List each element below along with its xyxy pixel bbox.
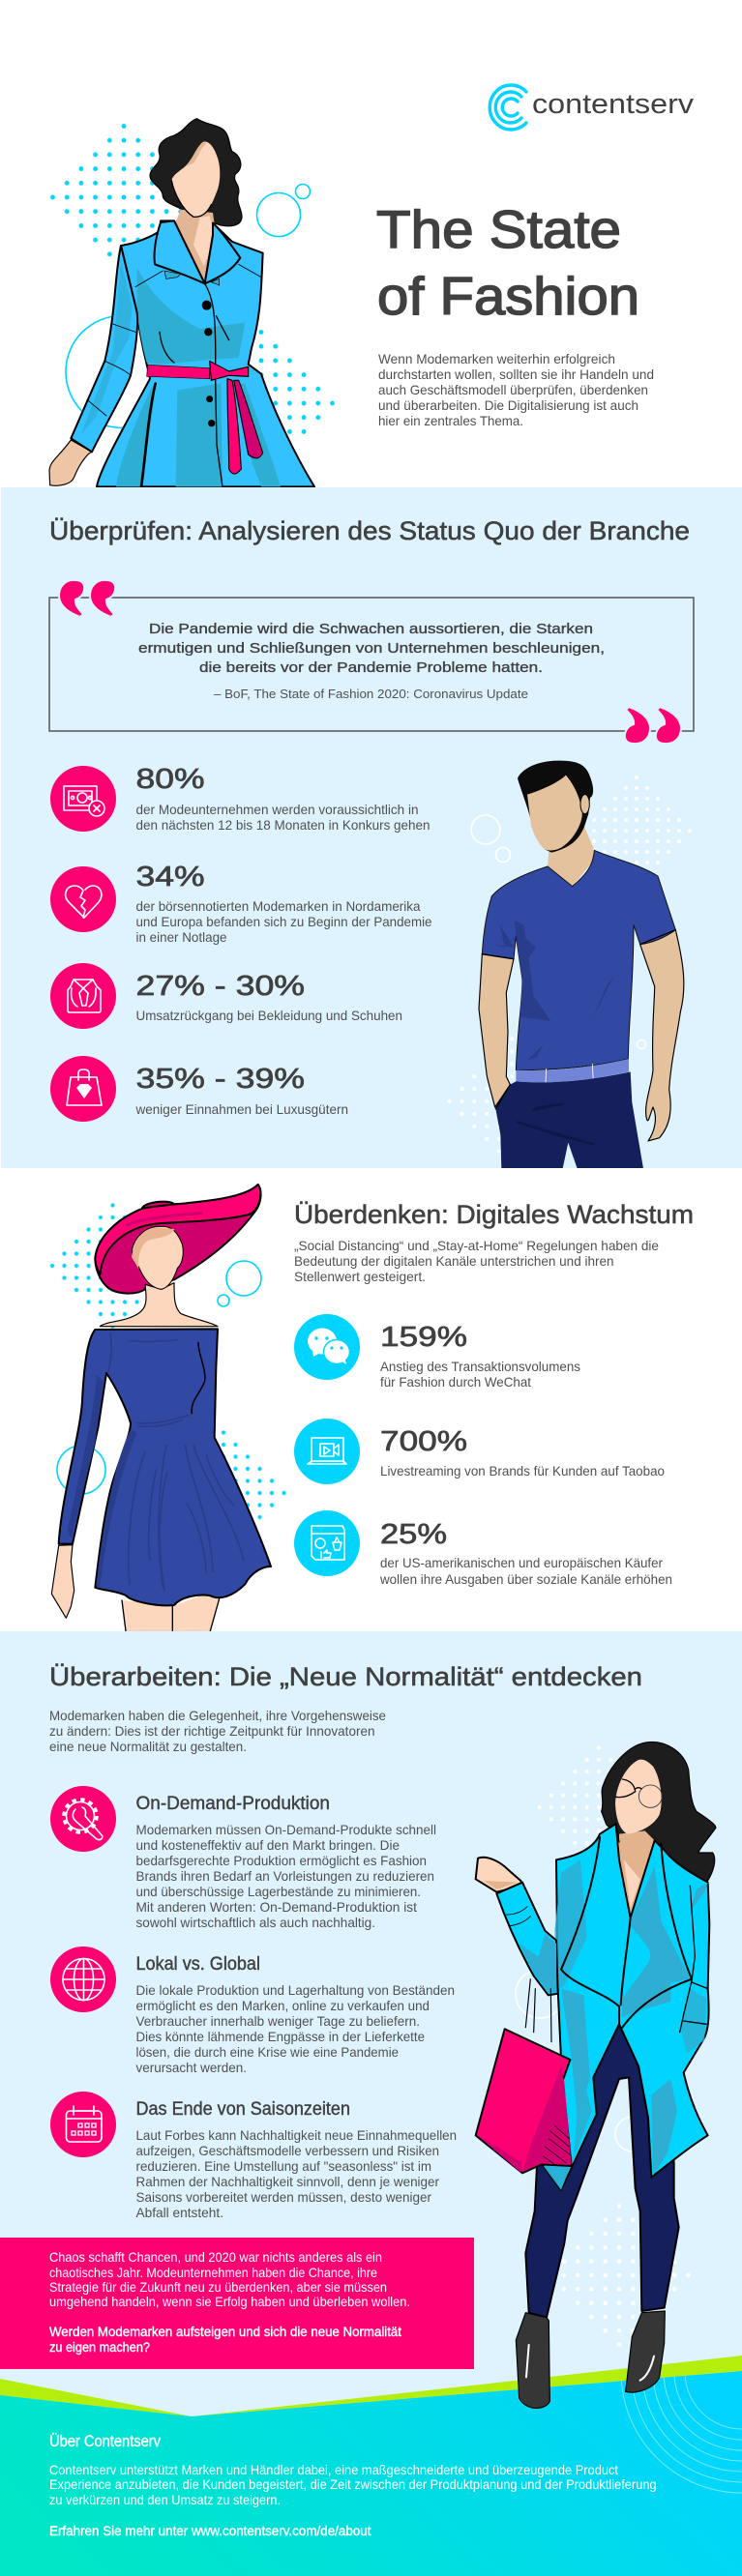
stat: 159%: für Fashion durch WeChat <box>380 1374 531 1390</box>
footer text: Contentserv unterstützt Marken und Händler dabei, eine maßgeschneiderte und überzeugende Product <box>49 2462 618 2477</box>
illustration: man in blue t-shirt <box>479 761 684 1168</box>
intro text <box>378 351 654 428</box>
item: Lokal vs. Global: verursacht werden. <box>135 2060 247 2075</box>
dots: behind first figure <box>45 119 202 276</box>
callout: pink conclusion box: zu eigen machen? <box>49 2339 150 2355</box>
callout: pink conclusion box: chaotisches Jahr. Modeunternehmen haben die Chance, ihre <box>49 2265 377 2280</box>
stat: 27% - 30%: 27% - 30% <box>135 971 305 1002</box>
rings: second figure <box>57 1261 261 1494</box>
illustration: woman in blue dress <box>49 119 314 486</box>
icon: gear and wrench <box>50 1786 116 1852</box>
quote text <box>138 621 605 676</box>
item: Lokal vs. Global <box>50 1947 455 2075</box>
intro text <box>294 1238 659 1284</box>
stat: 35% - 39%: weniger Einnahmen bei Luxusgütern <box>135 1101 348 1117</box>
panel: Überprüfen <box>1 487 742 1170</box>
stat: 80%: der Modeunternehmen werden voraussichtlich in <box>135 802 418 817</box>
stat: 25%: der US-amerikanischen und europäischen Käufer <box>380 1555 663 1570</box>
intro text: Stellenwert gesteigert. <box>294 1269 426 1284</box>
quote text: ermutigen und Schließungen von Unternehmen beschleunigen, <box>138 640 605 657</box>
intro text: Bedeutung der digitalen Kanäle unterstrichen und ihren <box>294 1253 613 1269</box>
quote source: – BoF, The State of Fashion 2020: Coronavirus Update <box>214 687 528 701</box>
stat: 27% - 30% <box>50 963 402 1029</box>
icon: wechat <box>294 1314 360 1380</box>
rings: man <box>471 815 646 1048</box>
stat: 35% - 39%: 35% - 39% <box>135 1064 305 1095</box>
stat: 80%: den nächsten 12 bis 18 Monaten in Konkurs gehen <box>135 817 430 833</box>
icon: shirt and tie <box>50 963 116 1029</box>
heading: Überarbeiten: Die „Neue Normalität“ entdecken <box>49 1662 642 1691</box>
item: Das Ende von Saisonzeiten <box>50 2092 457 2220</box>
panel: Überdenken <box>0 1168 742 1631</box>
intro text: durchstarten wollen, sollten sie ihr Handeln und <box>378 366 654 382</box>
item: Das Ende von Saisonzeiten: Laut Forbes kann Nachhaltigkeit neue Einnahmequellen <box>135 2127 457 2143</box>
stat: 700%: Livestreaming von Brands für Kunden auf Taobao <box>380 1463 665 1478</box>
panel: header <box>0 0 742 487</box>
dots: behind second figure bottom <box>157 1426 290 1560</box>
item: Das Ende von Saisonzeiten: Saisons vorbereitet werden müssen, desto weniger <box>135 2189 431 2205</box>
icon: opening quotes <box>59 580 115 617</box>
intro text: und überarbeiten. Die Digitalisierung ist auch <box>378 397 638 413</box>
intro text: hier ein zentrales Thema. <box>378 413 523 428</box>
title <box>376 199 639 326</box>
callout: pink conclusion box: Werden Modemarken aufsteigen und sich die neue Normalität <box>49 2324 401 2339</box>
intro text: eine neue Normalität zu gestalten. <box>49 1739 247 1754</box>
icon: luxury bag <box>50 1056 116 1122</box>
stat: 700% <box>294 1419 665 1484</box>
illustration: woman with pink hat <box>51 1185 271 1631</box>
stat: 34%: 34% <box>135 862 205 893</box>
callout: pink conclusion box: umgehend handeln, wenn sie Erfolg haben und überleben wollen. <box>49 2294 410 2309</box>
stat: 35% - 39% <box>50 1056 348 1122</box>
intro text: auch Geschäftsmodell überprüfen, überdenken <box>378 382 648 397</box>
callout: pink conclusion box: Strategie für die Zukunft neu zu überdenken, aber sie müssen <box>49 2279 387 2295</box>
dots: lower left of man <box>443 1033 580 1170</box>
item: Lokal vs. Global: Die lokale Produktion und Lagerhaltung von Beständen <box>135 1982 455 1998</box>
dots: lower third figure <box>543 2199 696 2352</box>
icon: globe <box>50 1947 116 2012</box>
icon: laptop video <box>294 1419 360 1484</box>
panel: Überarbeiten <box>0 1631 742 2576</box>
icon: broken heart <box>50 866 116 932</box>
footer band: green stripe and gradient <box>0 2356 742 2576</box>
item: Das Ende von Saisonzeiten: reduzieren. Eine Umstellung auf "seasonless" ist im <box>135 2158 431 2174</box>
stat: 159% <box>294 1314 580 1390</box>
stat: 34% <box>50 862 432 945</box>
item: On-Demand-Produktion: sowohl wirtschaftlich als auch nachhaltig. <box>135 1915 375 1930</box>
item: Das Ende von Saisonzeiten: Das Ende von Saisonzeiten <box>135 2099 350 2120</box>
intro text: Modemarken haben die Gelegenheit, ihre Vorgehensweise <box>49 1708 386 1723</box>
callout: pink conclusion box <box>0 2238 474 2369</box>
title: of Fashion <box>377 266 639 326</box>
stat: 80% <box>50 764 430 833</box>
footer heading: Über Contentserv <box>49 2432 161 2450</box>
footer link: Erfahren Sie mehr unter www.contentserv.com/de/about <box>49 2523 371 2538</box>
item: On-Demand-Produktion: Modemarken müssen On-Demand-Produkte schnell <box>135 1822 436 1837</box>
item: On-Demand-Produktion: Brands ihren Bedarf an Vorleistungen zu reduzieren <box>135 1868 434 1884</box>
footer text: zu verkürzen und den Umsatz zu steigern. <box>49 2492 281 2507</box>
item: Lokal vs. Global: Lokal vs. Global <box>135 1954 260 1975</box>
stat: 25%: 25% <box>380 1519 447 1550</box>
item: On-Demand-Produktion: Mit anderen Worten: On-Demand-Produktion ist <box>135 1899 417 1915</box>
stat: 159%: 159% <box>380 1322 467 1353</box>
dots: upper right of man <box>579 772 695 890</box>
stat: 80%: 80% <box>135 764 205 795</box>
icon: banknote cancelled <box>50 766 116 832</box>
icon: social shopping browser <box>294 1510 360 1576</box>
footer text: Experience anzubieten, die Kunden begeistert, die Zeit zwischen der Produktplanung und der Produktlieferung <box>49 2476 657 2492</box>
item: On-Demand-Produktion: bedarfsgerechte Produktion ermöglicht es Fashion <box>135 1853 427 1868</box>
quote text: Die Pandemie wird die Schwachen aussortieren, die Starken <box>149 621 593 637</box>
heading: Überprüfen: Analysieren des Status Quo der Branche <box>49 516 690 545</box>
dots: behind second figure top <box>46 1199 180 1332</box>
footer text <box>49 2462 657 2507</box>
title: The State <box>376 199 621 259</box>
illustration: woman with coat and bag <box>476 1742 716 2408</box>
callout: pink conclusion box: Chaos schafft Chancen, und 2020 war nichts anderes als ein <box>49 2249 382 2265</box>
icon: closing quotes <box>625 707 681 744</box>
stat: 34%: und Europa befanden sich zu Beginn der Pandemie <box>135 914 432 929</box>
quote box <box>49 580 694 744</box>
item: Lokal vs. Global: ermöglicht es den Marken, online zu verkaufen und <box>135 1998 430 2013</box>
logo: contentserv <box>490 85 695 130</box>
stat: 700%: 700% <box>380 1426 467 1457</box>
item: Das Ende von Saisonzeiten: Rahmen der Nachhaltigkeit sinnvoll, denn je weniger <box>135 2174 439 2189</box>
logo: contentserv: contentserv <box>532 89 695 120</box>
stat: 27% - 30%: Umsatzrückgang bei Bekleidung und Schuhen <box>135 1008 402 1023</box>
stat: 25% <box>294 1510 672 1587</box>
dots: upper third figure <box>533 1742 665 1873</box>
panel: footer text <box>49 2432 657 2538</box>
intro text: Wenn Modemarken weiterhin erfolgreich <box>378 351 615 366</box>
item: Das Ende von Saisonzeiten: Abfall entsteht. <box>135 2205 223 2220</box>
item: On-Demand-Produktion: On-Demand-Produktion <box>135 1794 330 1814</box>
rings: first figure <box>66 184 310 427</box>
stat: 34%: der börsennotierten Modemarken in Nordamerika <box>135 898 421 914</box>
dots: lower right of first figure <box>183 325 340 482</box>
item: On-Demand-Produktion: und kosteneffektiv auf den Markt bringen. Die <box>135 1837 400 1853</box>
item: On-Demand-Produktion: und überschüssige Lagerbestände zu minimieren. <box>135 1884 421 1899</box>
quote text: die bereits vor der Pandemie Probleme hatten. <box>199 659 543 676</box>
item: Lokal vs. Global: Verbraucher innerhalb weniger Tage zu beliefern. <box>135 2013 420 2029</box>
stat: 25%: wollen ihre Ausgaben über soziale Kanäle erhöhen <box>379 1571 672 1587</box>
stat: 159%: Anstieg des Transaktionsvolumens <box>380 1359 580 1374</box>
heading: Überdenken: Digitales Wachstum <box>294 1200 694 1229</box>
intro text: „Social Distancing“ und „Stay-at-Home“ Regelungen haben die <box>294 1238 659 1253</box>
intro text <box>49 1708 386 1754</box>
item: On-Demand-Produktion <box>50 1786 436 1930</box>
item: Lokal vs. Global: lösen, die durch eine Krise wie eine Pandemie <box>135 2044 399 2060</box>
rings: third figure <box>516 1970 650 2152</box>
intro text: zu ändern: Dies ist der richtige Zeitpunkt für Innovatoren <box>49 1723 375 1739</box>
item: Lokal vs. Global: Dies könnte lähmende Engpässe in der Lieferkette <box>135 2029 425 2044</box>
icon: calendar <box>50 2092 116 2157</box>
item: Das Ende von Saisonzeiten: aufzeigen, Geschäftsmodelle verbessern und Risiken <box>135 2143 439 2158</box>
stat: 34%: in einer Notlage <box>135 929 227 945</box>
